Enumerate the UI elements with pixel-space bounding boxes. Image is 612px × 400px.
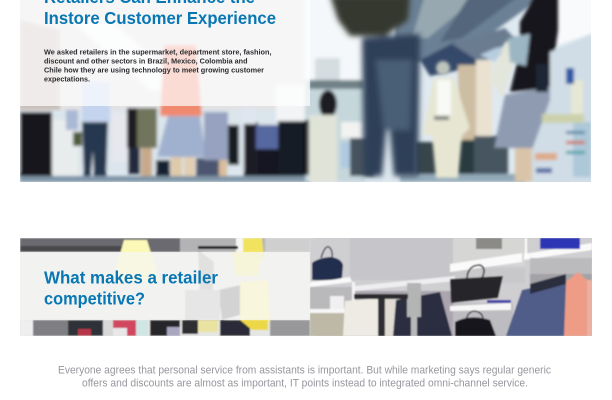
text block: survey introduction: discount and other sectors in Brazil, Mexico, Colombia and — [44, 58, 248, 66]
heading: what makes a retailer competitive: What makes a retailer — [44, 268, 218, 288]
text block: survey introduction: We asked retailers in the supermarket, department store, fashion, — [44, 50, 272, 56]
hanging jackets — [506, 280, 566, 336]
text block: competitive summary: Everyone agrees that personal service from assistants is important. But while marketing says regular generic — [58, 364, 551, 376]
display shelves — [532, 33, 595, 185]
colour right half — [310, 238, 595, 336]
woman with dark top and grey skirt — [510, 0, 558, 92]
photo: blurred shoppers in a mall — [10, 0, 595, 185]
heading: what makes a retailer competitive: competitive? — [44, 288, 145, 308]
text block: competitive summary: offers and discounts are almost as important, IT points instead to integrated omni-channel service. — [82, 378, 528, 390]
monochrome left half — [20, 238, 314, 336]
heading: instore customer experience: Instore Customer Experience — [44, 8, 276, 28]
heading: what makes a retailer competitive — [44, 268, 218, 308]
text block: survey introduction — [44, 50, 272, 84]
panel: translucent heading overlay — [20, 252, 310, 320]
left crowd — [20, 20, 310, 182]
panel: translucent intro overlay — [20, 0, 310, 106]
bags — [312, 257, 343, 280]
heading: instore customer experience — [44, 0, 276, 28]
text block: survey introduction: expectations. — [44, 76, 90, 84]
right scene — [305, 0, 595, 182]
striding foreground figure — [330, 0, 410, 36]
man in pale suit — [436, 61, 450, 75]
text block: survey introduction: Chile how they are using technology to meet growing customer — [44, 68, 264, 74]
text block: competitive summary — [58, 364, 551, 390]
photo: clothing store interior — [20, 238, 592, 336]
